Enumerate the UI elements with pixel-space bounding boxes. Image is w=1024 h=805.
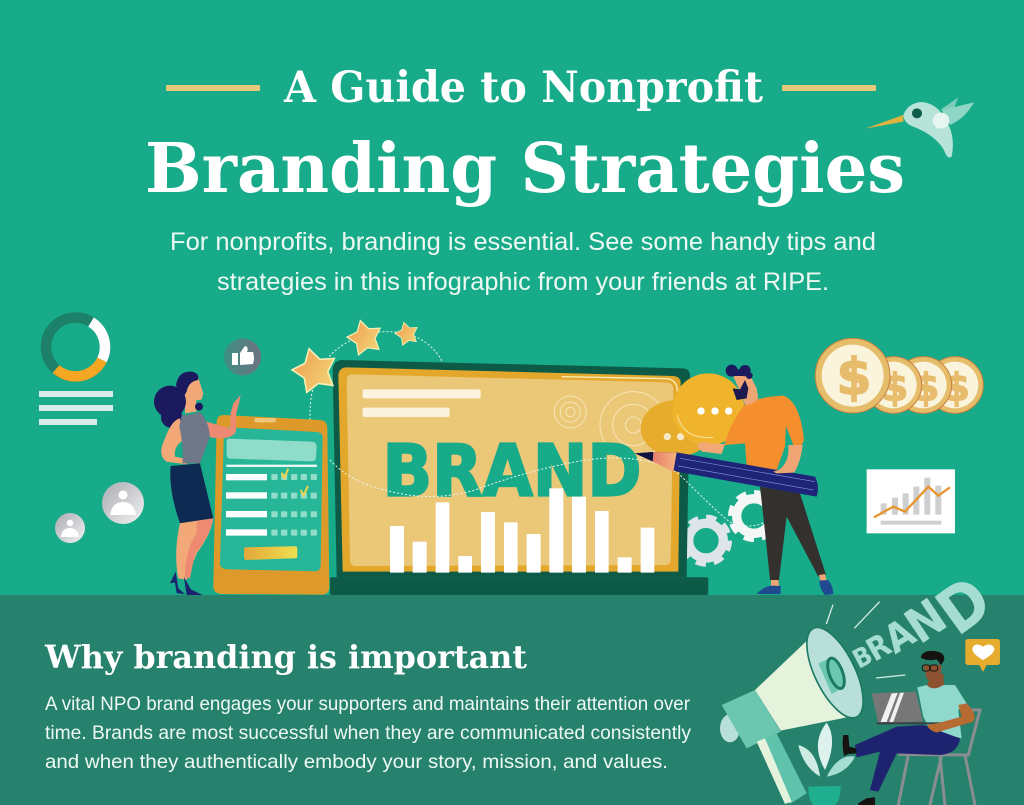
screen text lines — [363, 389, 481, 417]
legend lines — [39, 391, 113, 425]
chair — [898, 710, 980, 805]
icon: donut chart — [46, 318, 105, 376]
laptop — [330, 360, 708, 595]
dotted connector arc — [310, 332, 444, 420]
angled BRAND text: B — [847, 639, 877, 675]
stars — [288, 316, 421, 395]
woman — [154, 372, 241, 595]
title: A Guide to Nonprofit — [283, 63, 763, 113]
intro text: For nonprofits, branding is essential. See some handy tips and — [170, 228, 876, 256]
dotted connector wave — [330, 458, 765, 526]
section heading: Why branding is important — [44, 638, 527, 676]
section body text: A vital NPO brand engages your supporters and maintains their attention over — [45, 693, 690, 715]
bar chart — [390, 488, 654, 573]
speech bubble back — [641, 400, 713, 457]
gears on screen — [554, 392, 667, 458]
line chart card — [867, 469, 955, 533]
heading: branding strategies: Branding Strategies — [145, 129, 905, 209]
BRAND word: BRAND — [382, 430, 642, 512]
pencil — [635, 452, 818, 497]
angled BRAND text: D — [924, 563, 1005, 650]
plant — [798, 723, 855, 805]
submit button — [244, 546, 297, 560]
man with speech bubbles and pencil — [635, 365, 833, 595]
angled BRAND text — [847, 563, 1005, 675]
section body text: time. Brands are most successful when they are communicated consistently — [45, 722, 691, 744]
angled BRAND text: N — [895, 587, 957, 655]
icon: user large — [102, 482, 144, 524]
torso — [724, 396, 804, 470]
megaphone — [720, 620, 875, 804]
intro text — [170, 228, 876, 296]
person — [843, 651, 975, 805]
icon: user small — [55, 513, 85, 543]
gears — [683, 493, 777, 563]
hand — [773, 467, 797, 473]
angled BRAND text: A — [876, 609, 923, 663]
icon: heart bubble — [965, 639, 1000, 672]
legs — [760, 487, 826, 580]
icon: coins: $ — [943, 366, 970, 411]
icon: coins — [815, 338, 983, 413]
form rows — [226, 474, 267, 536]
megaphone illustration — [720, 563, 1005, 805]
sound lines — [826, 602, 905, 678]
phone — [213, 415, 329, 595]
angled BRAND text: R — [860, 627, 898, 669]
intro text: strategies in this infographic from your friends at RIPE. — [217, 268, 829, 296]
speech bubble front — [672, 373, 744, 445]
icon: coins: $ — [913, 366, 939, 411]
icon: hummingbird — [865, 97, 974, 157]
check marks — [282, 469, 308, 495]
speech bubble dots — [664, 433, 698, 440]
form checkboxes — [271, 474, 317, 536]
section body text: and when they authentically embody your story, mission, and values. — [45, 751, 668, 773]
title line left — [166, 85, 260, 91]
icon: coins: $ — [882, 366, 908, 411]
panel: why branding is important background — [0, 595, 1024, 805]
section body text — [45, 693, 691, 773]
head — [733, 372, 758, 405]
title line right — [782, 85, 876, 91]
icon: thumbs up — [224, 338, 261, 376]
laptop — [872, 692, 923, 723]
icon: coins: $ — [837, 348, 871, 406]
